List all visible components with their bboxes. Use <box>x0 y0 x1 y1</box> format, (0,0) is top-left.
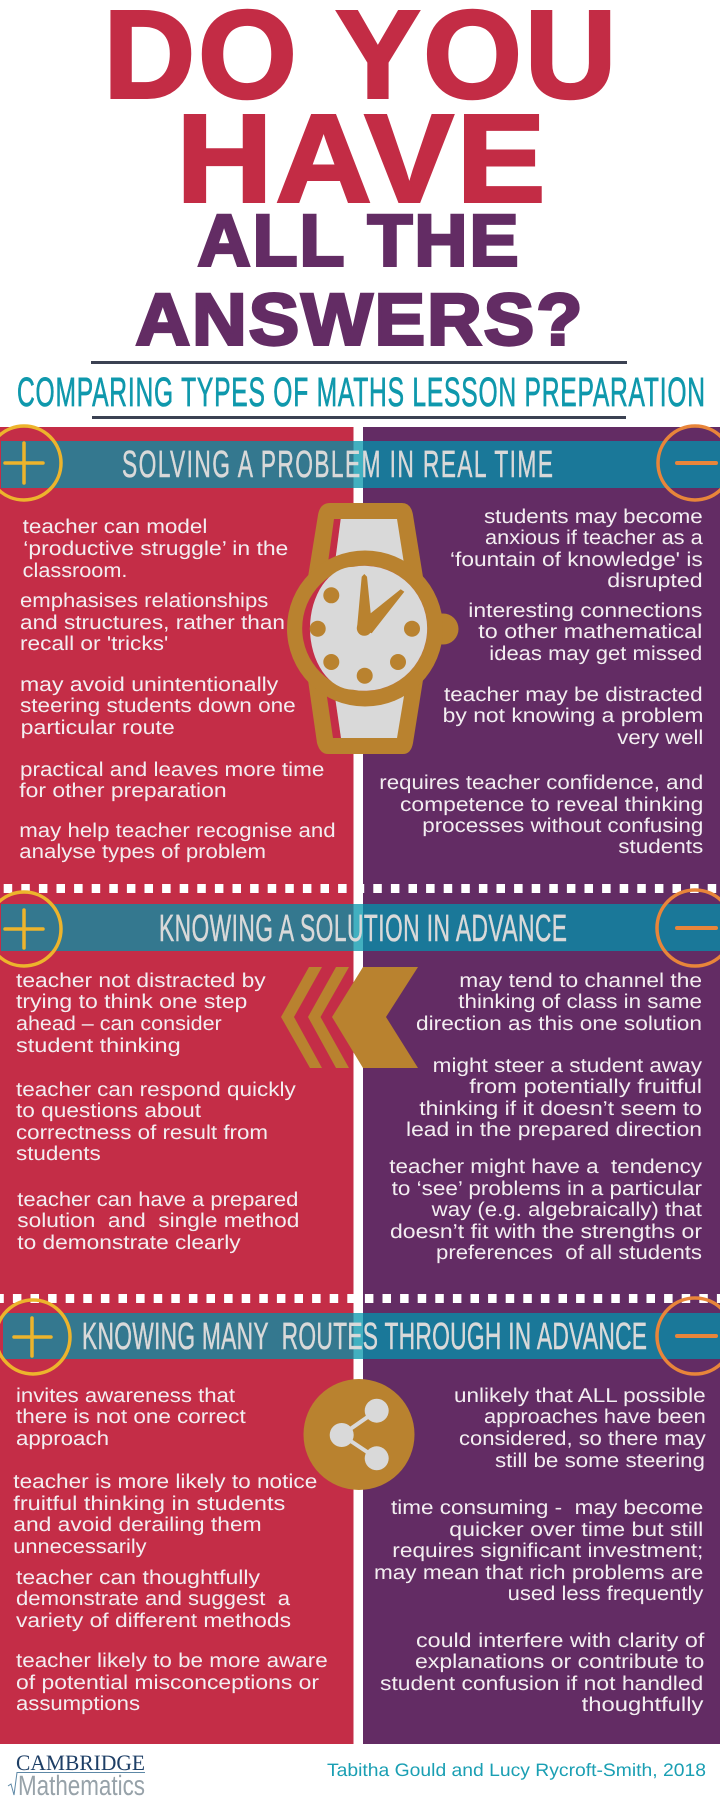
credit: Tabitha Gould and Lucy Rycroft-Smith, 2018 <box>327 1760 706 1780</box>
text: section 1 cons: ideas may get missed <box>489 643 702 665</box>
text: section 3 pros: invites awareness that <box>16 1385 235 1407</box>
section 2 banner <box>1 904 720 951</box>
icon: minus 2 <box>657 890 720 966</box>
text: section 1 cons: requires teacher confidence, and <box>379 772 703 794</box>
text: section 3 pros: variety of different methods <box>16 1610 291 1632</box>
text: section 3 pros: assumptions <box>16 1693 140 1715</box>
logo: Cambridge Mathematics: CAMBRIDGE <box>16 1750 145 1775</box>
text: section 1 cons: anxious if teacher as a <box>485 527 704 549</box>
text: section 1 cons: students <box>618 836 703 858</box>
text: section 3 pros: teacher can thoughtfully <box>16 1567 260 1589</box>
panel: cons column <box>363 427 720 1744</box>
text: section 2 cons: from potentially fruitful <box>469 1076 702 1098</box>
text: section 1 cons: ‘fountain of knowledge' is <box>450 549 703 571</box>
text: section 3 cons: considered, so there may <box>459 1428 706 1450</box>
text: section 3 cons <box>374 1385 706 1716</box>
text: section 3 pros: there is not one correct <box>16 1406 246 1428</box>
text: section 3 cons: used less frequently <box>508 1583 703 1605</box>
title: ALL THE <box>198 200 520 282</box>
text: section 1 cons: students may become <box>484 506 703 528</box>
text: section 3 cons: could interfere with clarity of <box>416 1630 705 1652</box>
text: section 1 pros: steering students down one <box>20 695 296 717</box>
icon: chevron arrows <box>281 967 418 1068</box>
text: section 3 cons: may mean that rich problems are <box>374 1562 703 1584</box>
text: section 3 pros <box>13 1385 328 1715</box>
subtitle: COMPARING TYPES OF MATHS LESSON PREPARATION <box>17 369 705 415</box>
text: section 1 pros: ‘productive struggle’ in the <box>23 538 288 560</box>
text: section 3 cons: thoughtfully <box>582 1694 703 1716</box>
text: section 1 pros: particular route <box>21 717 175 739</box>
text: section 3 cons: time consuming - may become <box>391 1497 703 1519</box>
text: section 1 pros: recall or 'tricks' <box>20 633 168 655</box>
text: section 3 pros: demonstrate and suggest a <box>16 1588 291 1610</box>
text: section 2 pros: correctness of result from <box>16 1122 268 1144</box>
text: section 2 cons: preferences of all students <box>436 1242 702 1264</box>
text: section 1 cons: very well <box>617 727 703 749</box>
text: section 2 cons: doesn’t fit with the strengths or <box>390 1221 702 1243</box>
text: section 1 pros: for other preparation <box>19 780 227 802</box>
text: section 2 cons: thinking of class in same <box>458 991 702 1013</box>
icon: plus 1 <box>0 426 61 500</box>
text: section 1 pros: teacher can model <box>23 516 207 538</box>
text: section 1 pros: and structures, rather than <box>20 612 285 634</box>
text: section 1 pros: may help teacher recognise and <box>19 820 336 842</box>
text: section 3 cons: quicker over time but still <box>449 1519 703 1541</box>
icon: plus 2 <box>0 892 61 966</box>
text: section 3 pros: and avoid derailing them <box>13 1514 262 1536</box>
text: section 2 pros: student thinking <box>16 1035 181 1057</box>
text: section 1 pros: may avoid unintentionally <box>20 674 278 696</box>
text: section 3 pros: unnecessarily <box>13 1536 147 1558</box>
title: HAVE <box>176 90 548 228</box>
text: section 1 cons: interesting connections <box>468 600 702 622</box>
text: section 3 cons: still be some steering <box>495 1450 705 1472</box>
text: section 2 cons: way (e.g. algebraically) that <box>431 1199 702 1221</box>
title <box>104 0 620 360</box>
text: section 1 cons: by not knowing a problem <box>443 705 703 727</box>
panel: pros column <box>0 427 354 1744</box>
text: section 2 pros <box>16 970 299 1254</box>
text: section 1 pros: analyse types of problem <box>19 841 266 863</box>
text: section 2 pros: trying to think one step <box>16 991 247 1013</box>
text: section 3 pros: fruitful thinking in students <box>13 1493 285 1515</box>
text: section 2 cons: teacher might have a tendency <box>389 1156 702 1178</box>
text: section 3 pros: teacher is more likely to notice <box>13 1471 317 1493</box>
text: section 2 pros: to questions about <box>16 1100 201 1122</box>
text: section 2 pros: teacher can respond quickly <box>16 1079 296 1101</box>
icon: plus 3 <box>0 1300 70 1374</box>
text: section 2 cons: lead in the prepared direction <box>406 1119 702 1141</box>
text: section 2 cons: to ‘see’ problems in a particular <box>392 1178 702 1200</box>
text: section 2 cons: may tend to channel the <box>459 970 702 992</box>
text: section 2 cons: might steer a student away <box>433 1055 702 1077</box>
text: section 2 cons <box>389 970 702 1264</box>
text: section 3 pros: approach <box>16 1428 109 1450</box>
icon: minus 1 <box>658 426 720 500</box>
text: section 3 cons: explanations or contribute to <box>415 1651 704 1673</box>
logo: Cambridge Mathematics <box>8 1750 145 1800</box>
text: section 2 cons: thinking if it doesn’t seem to <box>419 1098 702 1120</box>
text: section 1 cons: competence to reveal thinking <box>400 794 703 816</box>
title: ANSWERS? <box>136 280 584 360</box>
text: section 2 pros: students <box>16 1143 101 1165</box>
text: section 2 pros: solution and single method <box>17 1210 299 1232</box>
text: section 3 cons: unlikely that ALL possible <box>454 1385 706 1407</box>
text: section 1 pros <box>19 516 336 863</box>
text: section 3 pros: teacher likely to be more aware <box>16 1650 328 1672</box>
text: section 1 cons: to other mathematical <box>478 621 702 643</box>
text: section 3 pros: of potential misconceptions or <box>16 1672 319 1694</box>
text: section 1 cons: teacher may be distracted <box>444 684 703 706</box>
text: section 3 cons: requires significant investment; <box>392 1540 703 1562</box>
text: section 1 pros: practical and leaves more time <box>20 759 324 781</box>
text: section 2 cons: direction as this one solution <box>416 1013 702 1035</box>
text: section 1 cons: disrupted <box>607 570 703 592</box>
text: section 2 pros: ahead – can consider <box>16 1013 222 1035</box>
icon: watch <box>287 503 458 754</box>
icon: minus 3 <box>657 1298 720 1374</box>
section 3 banner: KNOWING MANY ROUTES THROUGH IN ADVANCE <box>82 1316 647 1358</box>
text: section 1 cons <box>379 506 704 858</box>
text: section 2 pros: teacher not distracted by <box>16 970 266 992</box>
section 1 banner <box>1 441 720 488</box>
text: section 2 pros: to demonstrate clearly <box>17 1232 241 1254</box>
text: section 1 cons: processes without confusing <box>422 815 703 837</box>
text: section 3 cons: student confusion if not handled <box>380 1673 703 1695</box>
icon: share <box>304 1379 414 1490</box>
text: section 1 pros: emphasises relationships <box>20 590 268 612</box>
text: section 2 pros: teacher can have a prepared <box>17 1189 298 1211</box>
section 1 banner: SOLVING A PROBLEM IN REAL TIME <box>122 444 553 486</box>
text: section 1 pros: classroom. <box>23 560 127 582</box>
section 2 banner: KNOWING A SOLUTION IN ADVANCE <box>159 908 567 950</box>
text: section 3 cons: approaches have been <box>484 1406 706 1428</box>
